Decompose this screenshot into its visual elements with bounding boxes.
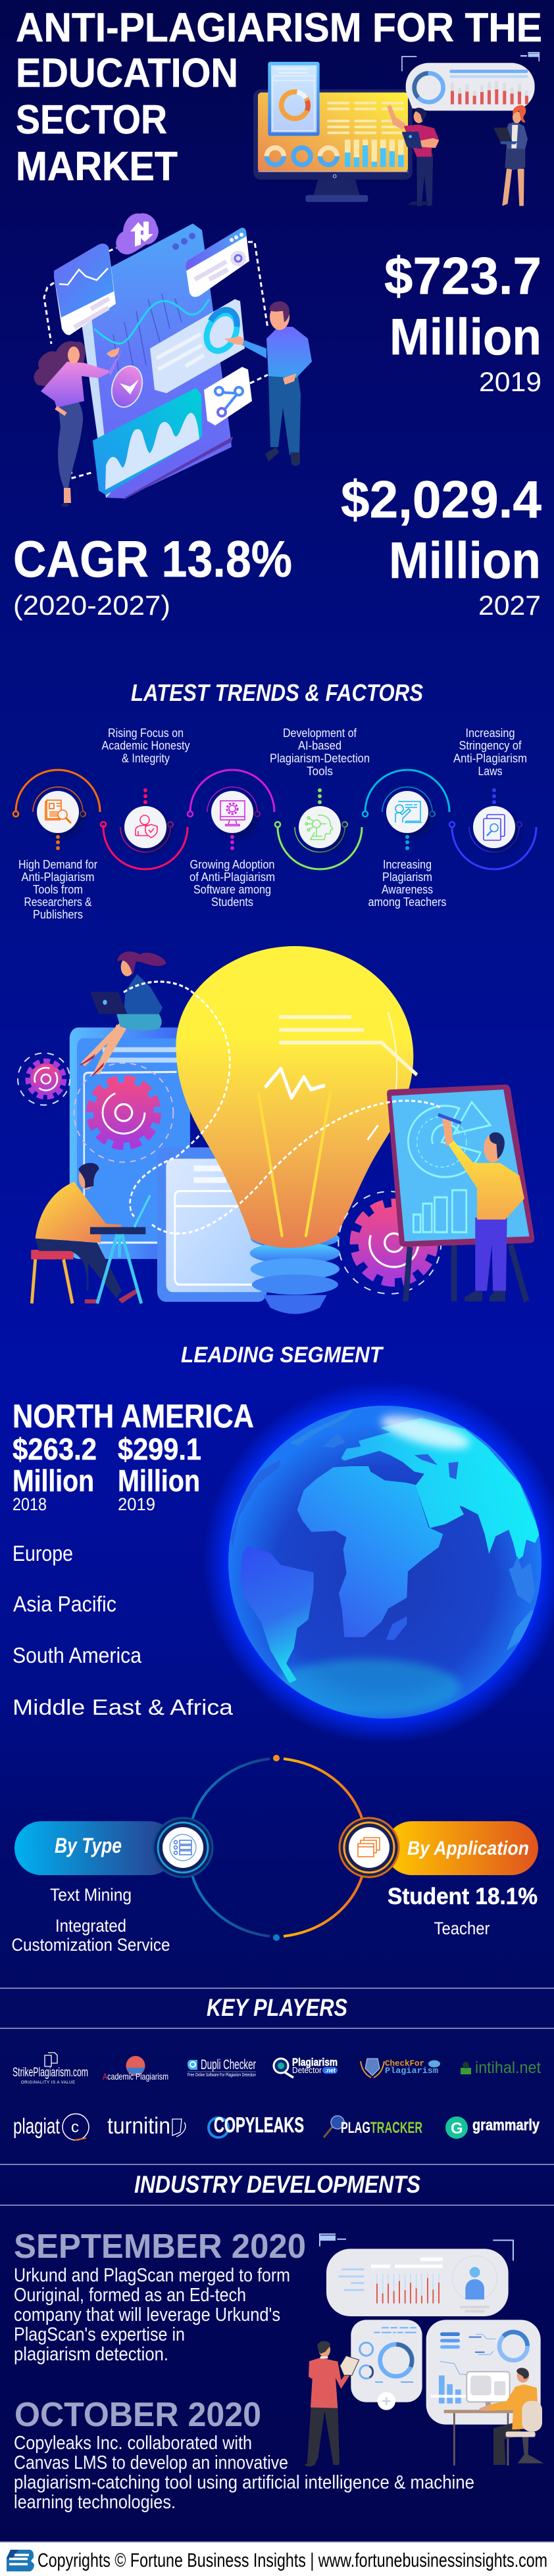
- trend 4: AI-based tools: Plagiarism-Detection: [270, 752, 370, 765]
- monitor: [253, 89, 413, 179]
- logo: PlagTracker: PLAGTRACKER: [341, 2119, 422, 2137]
- by application list: Teacher: [434, 1919, 490, 1938]
- north america block: Million: [13, 1464, 94, 1498]
- illustration: people with app screens: [34, 213, 312, 507]
- logo: grammarly: grammarly: [472, 2116, 540, 2134]
- logo: grammarly: [445, 2116, 540, 2139]
- trend 4: AI-based tools: AI-based: [298, 739, 341, 752]
- by type list: Integrated: [55, 1916, 126, 1936]
- illustration: dashboard monitor with two presenters: [253, 53, 539, 206]
- small gear: [18, 1053, 70, 1105]
- trend 1: high demand: High Demand for: [18, 858, 97, 871]
- logo: grammarly: G: [451, 2120, 463, 2137]
- chart card: [54, 244, 116, 335]
- development: September 2020: company that will leverage Urkund's: [14, 2304, 280, 2326]
- other regions: South America: [13, 1643, 142, 1667]
- trend 5: teacher awareness: Plagiarism: [382, 871, 432, 884]
- pill: by type: [14, 1818, 213, 1877]
- development: September 2020: Urkund and PlagScan merged to form: [14, 2265, 290, 2286]
- trend 5: teacher awareness: among Teachers: [368, 895, 446, 909]
- section: leading segment: [12, 1343, 554, 1955]
- globe: [203, 1380, 554, 1744]
- by application list: Student 18.1%: [388, 1884, 538, 1909]
- wave card: [93, 388, 202, 495]
- logo: plagiat: plagiat: [13, 2114, 60, 2138]
- lower gear: [338, 1191, 441, 1294]
- trend 4: AI-based tools: [270, 727, 370, 869]
- title: [16, 5, 542, 189]
- north america block: $299.1: [118, 1432, 201, 1466]
- monitor stand: [305, 179, 368, 202]
- other regions: Europe: [13, 1541, 73, 1565]
- speech bubble with bar chart: [406, 63, 535, 110]
- heading: LEADING SEGMENT: [181, 1343, 384, 1368]
- logo: CheckFor Plagiarism: Plagiarism: [385, 2066, 438, 2076]
- development: October 2020: Copyleaks Inc. collaborated with: [14, 2433, 252, 2454]
- bulb: [176, 946, 417, 1248]
- globe sphere: [228, 1406, 541, 1719]
- trend 3: growing adoption: Students: [211, 895, 253, 909]
- dashed connectors: [44, 242, 268, 478]
- CAGR: (2020-2027): [13, 590, 170, 621]
- man with clipboard: [305, 2341, 359, 2466]
- section: key players: [0, 1988, 554, 2205]
- pill: by type: By Type: [55, 1834, 122, 1857]
- frame corners: [320, 2234, 513, 2260]
- cloud icon: [116, 213, 159, 254]
- phone screen: [76, 224, 233, 500]
- north america block: $263.2: [13, 1432, 97, 1466]
- trend 6: stringency of laws: Anti-Plagiarism: [453, 752, 527, 765]
- footer bar: [0, 2542, 554, 2576]
- by type list: [12, 1885, 170, 1955]
- easel board with charts: [387, 1084, 534, 1301]
- woman figure: [34, 341, 122, 507]
- north america block: [13, 1398, 254, 1514]
- trend 2: academic honesty: [101, 727, 189, 869]
- logo: CheckFor Plagiarism: [361, 2059, 440, 2078]
- data card with ring: [150, 299, 245, 393]
- logo: Plagiarism Detector: Plagiarism: [292, 2056, 338, 2068]
- market size 2019: $723.7: [384, 247, 541, 305]
- window panel: [157, 1147, 266, 1302]
- check badge: [107, 362, 147, 411]
- other regions: [13, 1541, 234, 1719]
- trend 1: high demand: Researchers &: [24, 895, 92, 909]
- logo: Academic Plagiarism: Academic Plagiarism: [103, 2071, 168, 2082]
- logo: Copyleaks: COPYLEAKS: [214, 2113, 304, 2137]
- man drawing on board: [438, 1114, 524, 1301]
- market size 2019: Million: [390, 308, 541, 366]
- big gear: [74, 1063, 173, 1162]
- logo: StrikePlagiarism: ORIGINALITY IS A VALUE: [21, 2081, 75, 2085]
- heading: LATEST TRENDS & FACTORS: [131, 679, 423, 706]
- logo: Copyleaks: [209, 2113, 304, 2137]
- trend 5: teacher awareness: Awareness: [382, 883, 433, 896]
- section: industry developments: [14, 2171, 544, 2513]
- trend 5: teacher awareness: Increasing: [383, 858, 432, 871]
- logo: intihal.net: intihal.net: [475, 2059, 541, 2077]
- north america block: 2018: [13, 1494, 47, 1514]
- man figure: [224, 301, 312, 465]
- logo: CheckFor Plagiarism: CheckFor: [385, 2059, 424, 2068]
- trend 1: high demand: [13, 770, 100, 921]
- bulb base: [250, 1228, 340, 1314]
- by type list: Customization Service: [12, 1935, 170, 1955]
- man at computer: [479, 2368, 544, 2465]
- logo: Plagiarism Detector: .net: [325, 2067, 336, 2074]
- logo: Dupli Checker: [188, 2057, 256, 2078]
- profile panel: [326, 2249, 509, 2316]
- segment ring: [192, 1755, 363, 1941]
- title: EDUCATION: [16, 51, 238, 96]
- other regions: Middle East & Africa: [13, 1695, 234, 1719]
- development: October 2020: plagiarism-catching tool using artificial intelligence & machine: [14, 2472, 474, 2493]
- by type list: Text Mining: [50, 1885, 132, 1905]
- north america block: 2019: [118, 1494, 155, 1514]
- logo: Dupli Checker: Free Online Software For Plagiarism Detection: [188, 2073, 256, 2078]
- browser card: [186, 228, 249, 297]
- woman sitting with laptop: [80, 951, 166, 1076]
- frame corners: [402, 53, 539, 71]
- logo: PlagTracker: [324, 2116, 422, 2137]
- market size 2027: [341, 470, 541, 621]
- market size 2027: 2027: [478, 590, 541, 621]
- trend 1: high demand: Publishers: [33, 908, 83, 921]
- back panel: [70, 1028, 190, 1259]
- CAGR: CAGR 13.8%: [13, 530, 292, 588]
- trend 3: growing adoption: Software among: [193, 883, 271, 896]
- pill: by application: By Application: [407, 1838, 529, 1859]
- development: October 2020: [14, 2396, 474, 2513]
- heading: KEY PLAYERS: [207, 1994, 347, 2021]
- trend 1: high demand: Tools from: [33, 883, 83, 896]
- heading: INDUSTRY DEVELOPMENTS: [134, 2171, 420, 2198]
- trend 2: academic honesty: Rising Focus on: [108, 727, 184, 740]
- pill: by application: [340, 1818, 538, 1877]
- logo: Dupli Checker: Dupli Checker: [201, 2057, 256, 2072]
- donut panel: [351, 2320, 422, 2410]
- trend 3: growing adoption: [188, 770, 275, 909]
- globe glow: [203, 1380, 554, 1744]
- development: October 2020: Canvas LMS to develop an innovative: [14, 2452, 288, 2473]
- logo: turnitin: turnitin: [107, 2113, 170, 2139]
- dashed curves: [124, 982, 441, 1233]
- trend 6: stringency of laws: Laws: [478, 765, 503, 778]
- development: September 2020: SEPTEMBER 2020: [14, 2228, 306, 2266]
- trend 6: stringency of laws: Stringency of: [459, 739, 522, 752]
- development: September 2020: [14, 2228, 306, 2365]
- market size 2027: $2,029.4: [341, 470, 541, 529]
- north america block: Million: [118, 1464, 200, 1498]
- section: latest trends and factors: [13, 679, 536, 1314]
- development: September 2020: plagiarism detection.: [14, 2344, 168, 2365]
- CAGR: [13, 530, 292, 621]
- development: September 2020: Ouriginal, formed as an Ed-tech: [14, 2285, 246, 2306]
- north america block: NORTH AMERICA: [13, 1398, 254, 1435]
- presenter man: [387, 105, 439, 206]
- logo: Plagiarism Detector: Detector: [292, 2065, 322, 2075]
- logo: Academic Plagiarism: [103, 2056, 168, 2082]
- section: header and market size: [13, 5, 542, 621]
- title: MARKET: [16, 144, 178, 189]
- development: September 2020: PlagScan's expertise in: [14, 2324, 185, 2345]
- development: October 2020: OCTOBER 2020: [14, 2396, 261, 2434]
- market size 2019: [384, 247, 541, 397]
- trend 6: stringency of laws: Increasing: [466, 727, 515, 740]
- illustration: analytics team: [305, 2234, 544, 2466]
- market size 2027: Million: [389, 531, 541, 589]
- continents: [230, 1406, 540, 1716]
- other regions: Asia Pacific: [13, 1592, 116, 1616]
- computer panel: [426, 2320, 541, 2466]
- trend 2: academic honesty: & Integrity: [122, 752, 170, 765]
- trend 3: growing adoption: Growing Adoption: [189, 858, 275, 871]
- trend 4: AI-based tools: Development of: [283, 727, 357, 740]
- trend 4: AI-based tools: Tools: [307, 765, 333, 778]
- share card: [204, 367, 252, 425]
- seated man at desk: [31, 1163, 150, 1304]
- market size 2019: 2019: [479, 366, 541, 397]
- presenter woman: [493, 105, 528, 206]
- by application list: [388, 1884, 538, 1938]
- logo: Plagiarism Detector: [274, 2056, 338, 2078]
- trend 2: academic honesty: Academic Honesty: [101, 739, 189, 752]
- trend 1: high demand: Anti-Plagiarism: [21, 871, 95, 884]
- logo: StrikePlagiarism: StrikePlagiarism.com: [13, 2066, 88, 2080]
- trend 6: stringency of laws: [449, 727, 536, 869]
- tablet with donut chart: [268, 62, 320, 136]
- trend 5: teacher awareness: [363, 770, 449, 909]
- development: October 2020: learning technologies.: [14, 2492, 176, 2513]
- trend 3: growing adoption: of Anti-Plagiarism: [189, 871, 275, 884]
- footer logo: [7, 2550, 34, 2571]
- title: SECTOR: [16, 97, 167, 143]
- logo: plagiat: c: [71, 2118, 79, 2136]
- illustration: light bulb with people: [18, 946, 534, 1314]
- logo: StrikePlagiarism: [13, 2053, 88, 2085]
